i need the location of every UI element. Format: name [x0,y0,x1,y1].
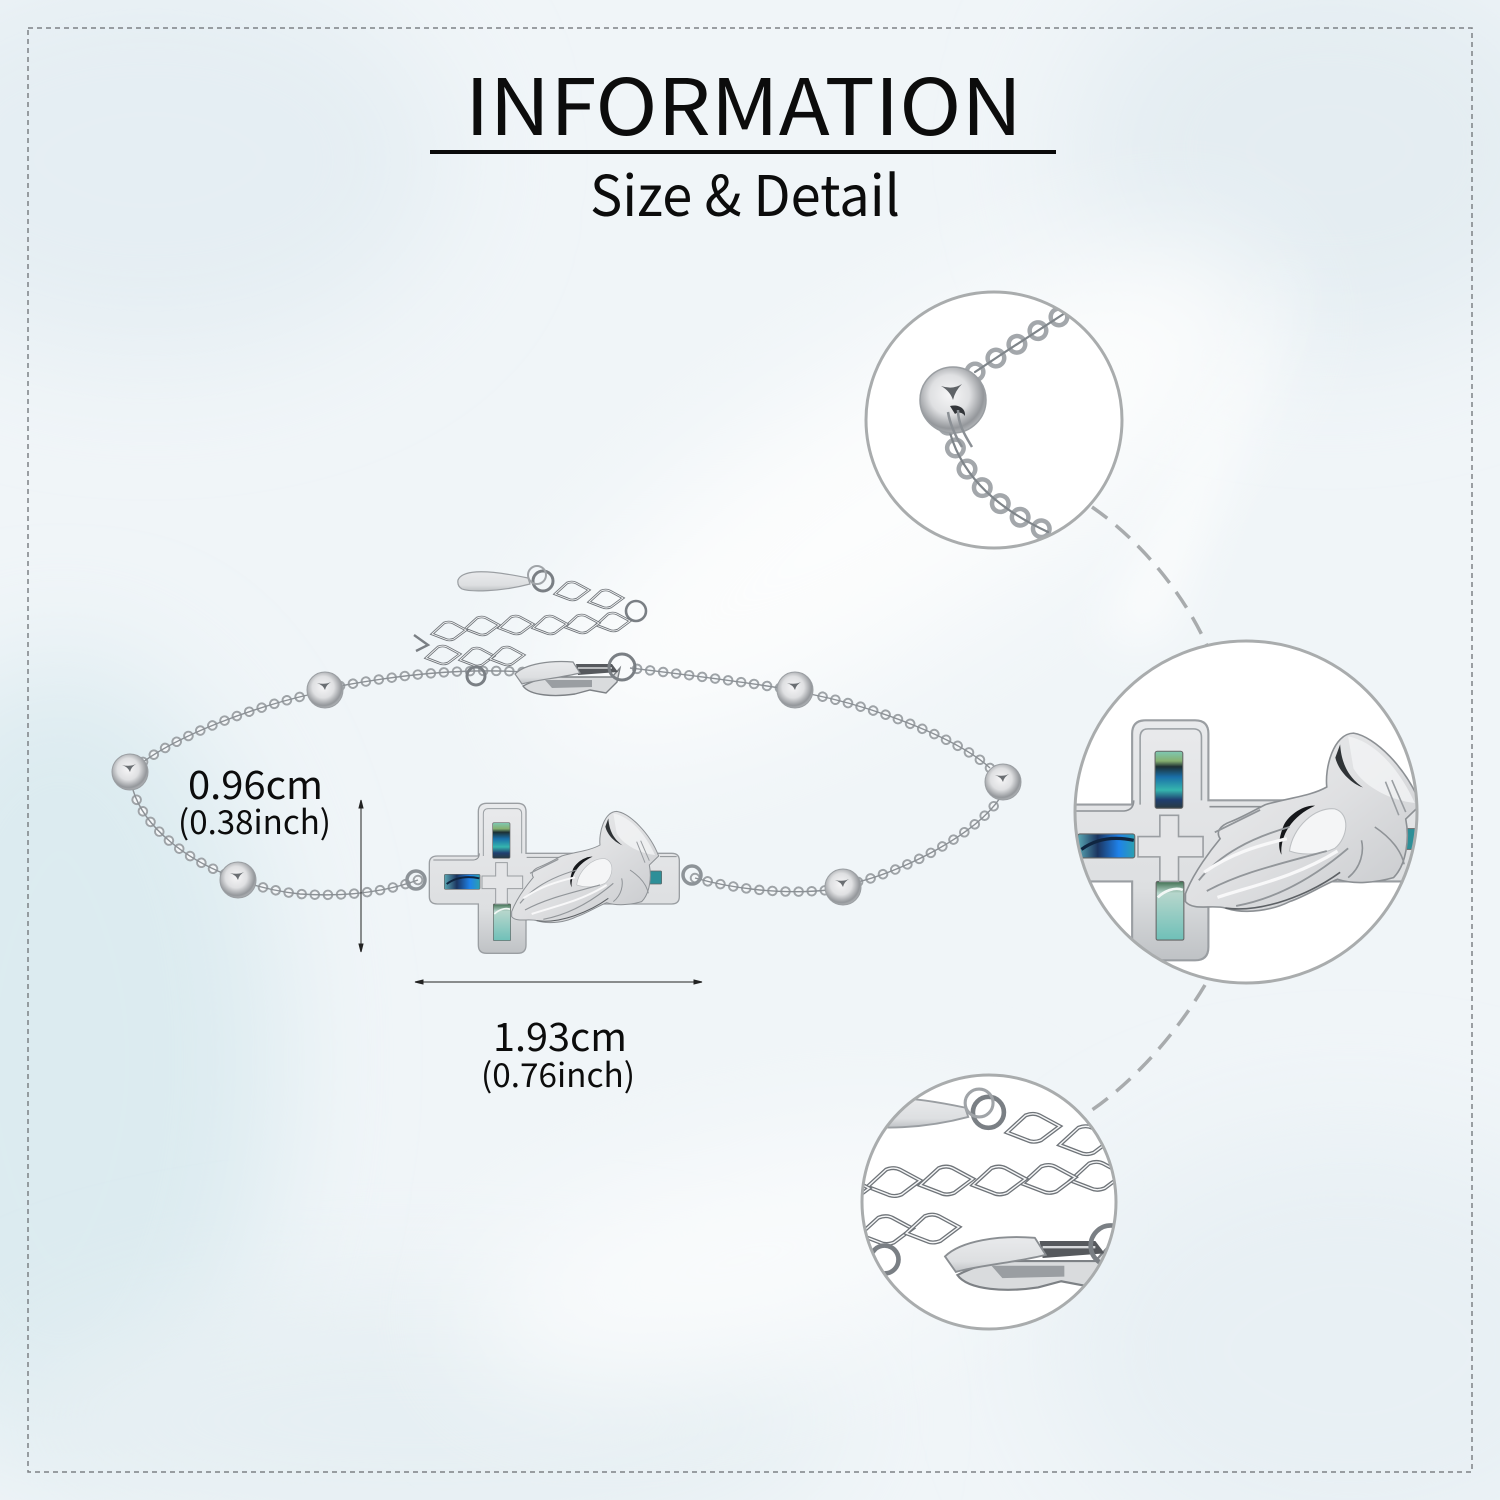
bead [985,764,1021,800]
height label inch: (0.38inch) [178,796,331,844]
detail circle: extender and clasp [860,1074,1118,1330]
height arrow [359,800,363,952]
bead [220,862,256,898]
dashed connector top [1092,507,1208,648]
title: INFORMATION [465,46,1022,158]
height label cm: 0.96cm [188,755,323,811]
bead [307,672,343,708]
bead [777,672,813,708]
bead [112,754,148,790]
title underline [430,150,1056,154]
dashed connector bottom [1092,985,1205,1110]
detail circle: bead and chain [866,292,1122,548]
height measurement [178,755,363,952]
cross and praying hands pendant [429,803,679,953]
bracelet chain [133,668,1000,895]
bead [825,869,861,905]
connector ring [683,866,701,884]
width measurement [415,980,702,1097]
detail circle: cross pendant [1074,640,1418,984]
width arrow [415,980,702,984]
connector ring [407,871,425,889]
extender chain and clasp [414,566,646,695]
width label cm: 1.93cm [493,1007,627,1063]
subtitle: Size & Detail [590,152,900,233]
width label inch: (0.76inch) [481,1049,635,1097]
bracelet [112,566,1021,953]
